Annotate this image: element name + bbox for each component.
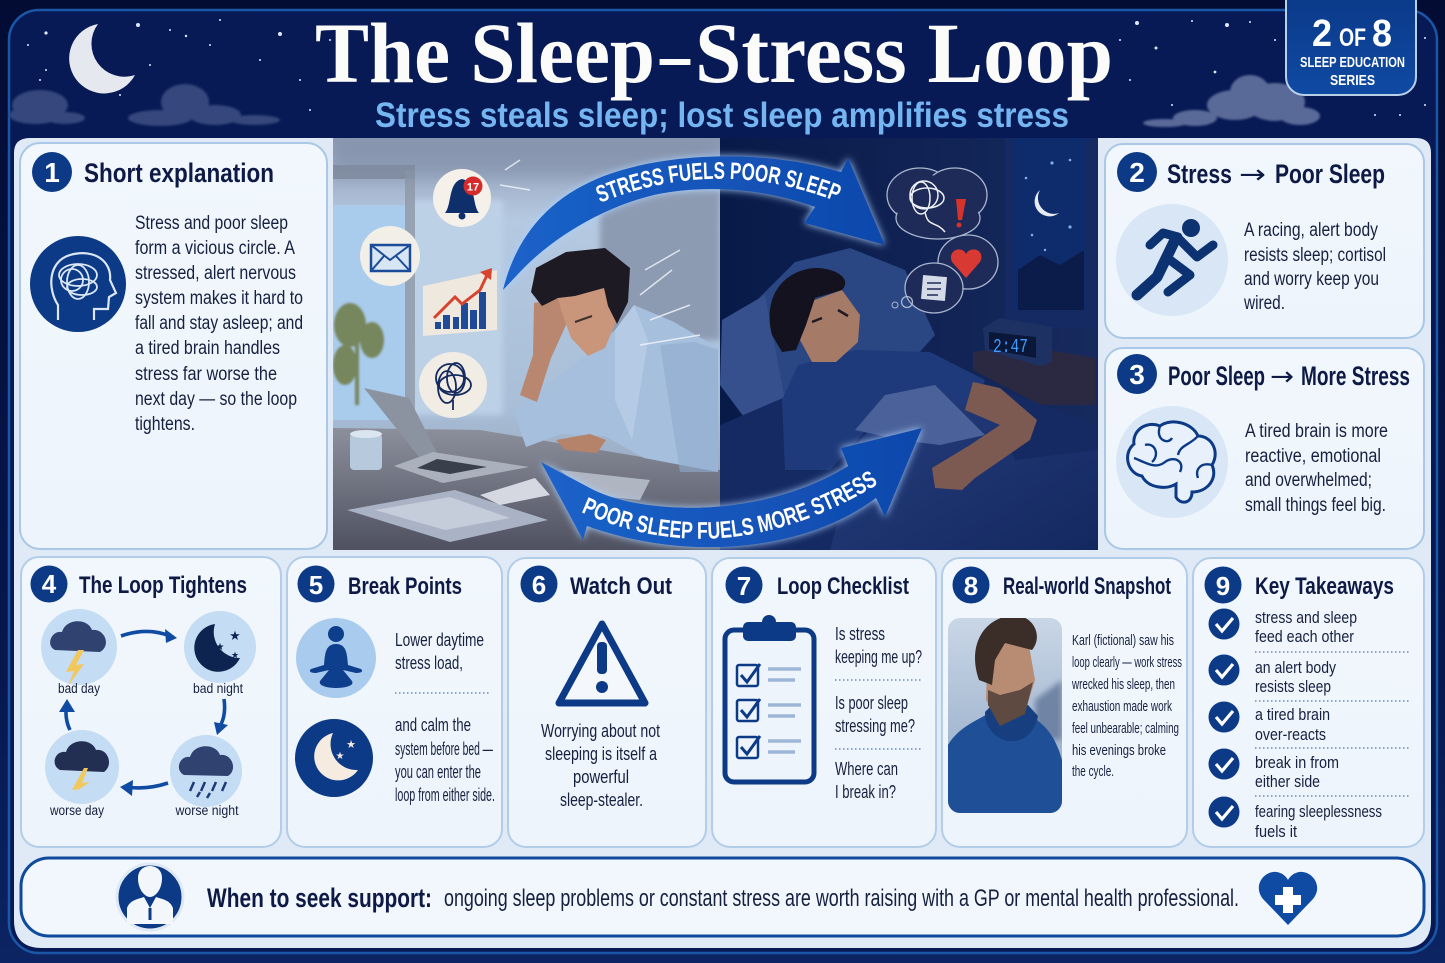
icon: doctor <box>117 864 183 930</box>
panel 7: loop checklist <box>712 558 936 847</box>
body text: Stress and poor sleep <box>135 213 288 234</box>
icon: worse night rain cloud <box>170 735 242 807</box>
subtitle: Stress steals sleep; lost sleep amplifies stress <box>375 96 1069 135</box>
man: hair <box>770 268 845 352</box>
number badge 9: 9 <box>1216 571 1230 601</box>
heading: Poor Sleep <box>1275 159 1385 189</box>
number badge 6: 6 <box>532 570 546 600</box>
clouds: right <box>1143 75 1320 127</box>
panel 9: key takeaways <box>1193 558 1424 847</box>
icon: moon and stars: ★ <box>336 751 345 762</box>
takeaway text: resists sleep <box>1255 677 1331 696</box>
number badge 2: 2 <box>1129 157 1145 188</box>
body text: stressed, alert nervous <box>135 263 296 284</box>
number badge 7 <box>726 566 762 604</box>
number badge 2 <box>1117 152 1157 192</box>
title: – <box>659 5 691 101</box>
text: calm the system <box>395 715 495 805</box>
body text: small things feel big. <box>1245 495 1386 516</box>
body text: fall and stay asleep; and <box>135 313 303 334</box>
alarm clock 2:47: 2:47 <box>993 336 1028 358</box>
heading <box>1168 361 1410 392</box>
panel 5: break points <box>287 557 502 847</box>
man: arm and hand <box>932 382 1037 490</box>
man: face <box>800 290 860 362</box>
body text: Worrying about not <box>541 721 660 741</box>
body text: a tired brain handles <box>135 338 280 359</box>
body text: system makes it hard to <box>135 288 303 309</box>
icon: bad night moon: ★ <box>216 642 225 653</box>
window <box>1005 138 1086 322</box>
stars <box>27 19 1426 116</box>
takeaway text: over-reacts <box>1255 725 1326 744</box>
number badge 9 <box>1204 566 1242 604</box>
photo: Karl <box>948 616 1062 813</box>
label: worse night <box>175 803 239 818</box>
title: The Sleep <box>315 5 655 101</box>
body text: exhaustion made work <box>1072 698 1172 715</box>
icon: moon and stars <box>295 719 373 797</box>
body text: the cycle. <box>1072 763 1114 780</box>
body text: A tired brain is more <box>1245 421 1388 442</box>
laptop <box>364 388 529 483</box>
question text <box>835 624 922 802</box>
body text: sleeping is itself a <box>545 744 658 764</box>
text: calm the system: and calm the <box>395 715 471 735</box>
icon: head with tangled thoughts <box>30 236 126 332</box>
body text: Karl (fictional) saw his <box>1072 632 1174 649</box>
arrow: stress fuels poor sleep <box>503 150 889 290</box>
takeaway text: stress and sleep <box>1255 608 1357 627</box>
takeaway text: either side <box>1255 772 1320 791</box>
heading: Poor Sleep <box>1168 361 1265 391</box>
desk <box>333 428 720 550</box>
number badge 7: 7 <box>737 571 751 601</box>
panel: when to seek support <box>21 858 1424 936</box>
icon: tangled thoughts <box>419 352 487 418</box>
icon: warning triangle <box>559 624 645 703</box>
text: lower stress: stress load, <box>395 653 463 673</box>
number badge 5 <box>298 566 334 602</box>
question text: Is poor sleep <box>835 693 908 713</box>
question text: I break in? <box>835 782 896 802</box>
text: calm the system: system before bed — <box>395 739 493 759</box>
thought cloud: heart and list <box>892 235 998 313</box>
label: worse day <box>49 803 104 818</box>
support text <box>207 883 1239 913</box>
body text <box>135 213 303 435</box>
alarm clock 2:47 <box>983 318 1052 366</box>
man: face <box>558 288 620 356</box>
badge: 2 of 8 series <box>1286 0 1416 95</box>
icon: moon and stars: ★ <box>346 739 356 751</box>
scene: sleepless man in bed <box>720 138 1098 550</box>
question text: Is stress <box>835 624 885 644</box>
icon: clipboard checklist <box>725 615 814 782</box>
body text <box>1071 632 1182 780</box>
bed and blanket <box>720 384 1044 550</box>
number badge 8 <box>952 566 990 604</box>
icon: bad day storm cloud <box>41 609 117 686</box>
body text: and overwhelmed; <box>1245 470 1372 491</box>
nightstand <box>973 345 1095 405</box>
takeaway text: fearing sleeplessness <box>1255 802 1382 821</box>
scene: stressed man at desk <box>333 138 720 550</box>
title: Stress Loop <box>695 5 1113 101</box>
panel 1: short explanation <box>20 143 327 549</box>
support text: When to seek support: <box>207 883 432 913</box>
body text: reactive, emotional <box>1245 446 1381 467</box>
body text: wrecked his sleep, then <box>1071 676 1175 693</box>
number badge 3: 3 <box>1129 359 1145 390</box>
motion lines <box>500 160 700 345</box>
panel 8: real-world snapshot <box>942 558 1187 847</box>
icon: worse day storm cloud <box>45 730 119 804</box>
body text <box>1243 220 1386 314</box>
takeaway text: fuels it <box>1255 822 1297 841</box>
man: hair <box>531 248 630 324</box>
icon: envelope <box>360 226 420 286</box>
heading <box>1167 159 1385 190</box>
number badge 1 <box>32 152 72 192</box>
thought cloud: tangled worry <box>887 168 987 239</box>
badge: 2 of 8 series: SLEEP EDUCATION <box>1300 55 1405 71</box>
text: lower stress: Lower daytime <box>395 630 484 650</box>
title <box>315 5 1113 101</box>
panel 2: stress to poor sleep <box>1105 144 1424 338</box>
number badge 5: 5 <box>309 570 323 600</box>
icon: runner <box>1116 204 1228 316</box>
body text: A racing, alert body <box>1244 220 1378 241</box>
body text: loop clearly — work stress <box>1072 654 1182 671</box>
question text: keeping me up? <box>835 647 922 667</box>
heading: Stress <box>1167 159 1232 189</box>
loop arrows <box>59 629 228 796</box>
number badge 8: 8 <box>964 571 978 601</box>
body text: form a vicious circle. A <box>135 238 295 259</box>
takeaway text: a tired brain <box>1255 705 1330 724</box>
label: bad day <box>58 681 100 696</box>
icon: bell notification: 17 <box>467 182 479 194</box>
panel 6: watch out <box>508 558 706 847</box>
icon: heart with cross <box>1259 872 1317 925</box>
icon: bad night moon: ★ <box>229 628 241 643</box>
papers <box>347 470 650 542</box>
check icons <box>1208 608 1240 828</box>
mug <box>350 430 382 470</box>
number badge 1: 1 <box>44 157 60 188</box>
body text: wired. <box>1243 293 1285 314</box>
body text: tightens. <box>135 414 195 435</box>
icon: meditating person <box>296 618 376 698</box>
icon: bad night moon <box>184 611 256 683</box>
takeaway text <box>1255 608 1382 841</box>
body text <box>541 721 660 810</box>
icon: crescent moon <box>69 24 135 93</box>
badge: 2 of 8 series: 8 <box>1372 13 1392 55</box>
heading: Watch Out <box>570 573 672 600</box>
heading: The Loop Tightens <box>79 572 247 599</box>
body text: and worry keep you <box>1244 269 1379 290</box>
illustration: sleep-stress loop scene <box>333 138 1098 550</box>
takeaway text: feed each other <box>1255 627 1354 646</box>
badge: 2 of 8 series: 2 <box>1312 13 1332 55</box>
arrow: poor sleep fuels more stress: POOR SLEEP FUELS MORE STRESS <box>582 472 876 539</box>
number badge 4 <box>30 566 68 602</box>
panel 3: poor sleep to more stress <box>1105 348 1424 549</box>
icon: brain <box>1116 406 1228 518</box>
question text: Where can <box>835 759 898 779</box>
question text: stressing me? <box>835 716 915 736</box>
body text: resists sleep; cortisol <box>1244 245 1386 266</box>
icon: bell notification <box>433 169 491 227</box>
text: lower stress <box>395 630 484 673</box>
heading: Break Points <box>348 573 462 600</box>
pillows <box>720 248 935 425</box>
heading: Real-world Snapshot <box>1003 573 1171 600</box>
number badge 4: 4 <box>42 569 57 599</box>
heading: Loop Checklist <box>777 573 909 600</box>
number badge 6 <box>520 566 558 602</box>
clouds: left <box>9 84 280 126</box>
takeaway text: break in from <box>1255 753 1339 772</box>
badge: 2 of 8 series: SERIES <box>1330 73 1375 89</box>
label: bad night <box>193 681 243 696</box>
man: arm and hand <box>520 298 566 402</box>
text: calm the system: loop from either side. <box>395 785 495 805</box>
icon: bad night moon: ★ <box>231 650 239 660</box>
man: t-shirt <box>782 350 985 470</box>
heading: → <box>1239 160 1266 190</box>
heading: Key Takeaways <box>1255 573 1394 600</box>
body text: sleep-stealer. <box>560 790 643 810</box>
heading: → <box>1270 362 1294 392</box>
panel 4: the loop tightens <box>21 557 281 847</box>
body text: feel unbearable; calming <box>1072 720 1179 737</box>
body text: stress far worse the <box>135 364 277 385</box>
arrow: poor sleep fuels more stress <box>538 424 925 550</box>
body text <box>1245 421 1388 516</box>
arrow: stress fuels poor sleep: STRESS FUELS POOR SLEEP <box>596 162 841 202</box>
number badge 3 <box>1117 354 1157 394</box>
takeaway text: an alert body <box>1255 658 1336 677</box>
body text: next day — so the loop <box>135 389 297 410</box>
man: shirt <box>514 305 718 472</box>
heading: Short explanation <box>84 158 274 188</box>
text: calm the system: you can enter the <box>395 762 481 782</box>
body text: his evenings broke <box>1072 742 1166 759</box>
body text: powerful <box>573 767 629 787</box>
badge: 2 of 8 series: OF <box>1339 24 1366 52</box>
icon: rising chart <box>423 268 497 336</box>
